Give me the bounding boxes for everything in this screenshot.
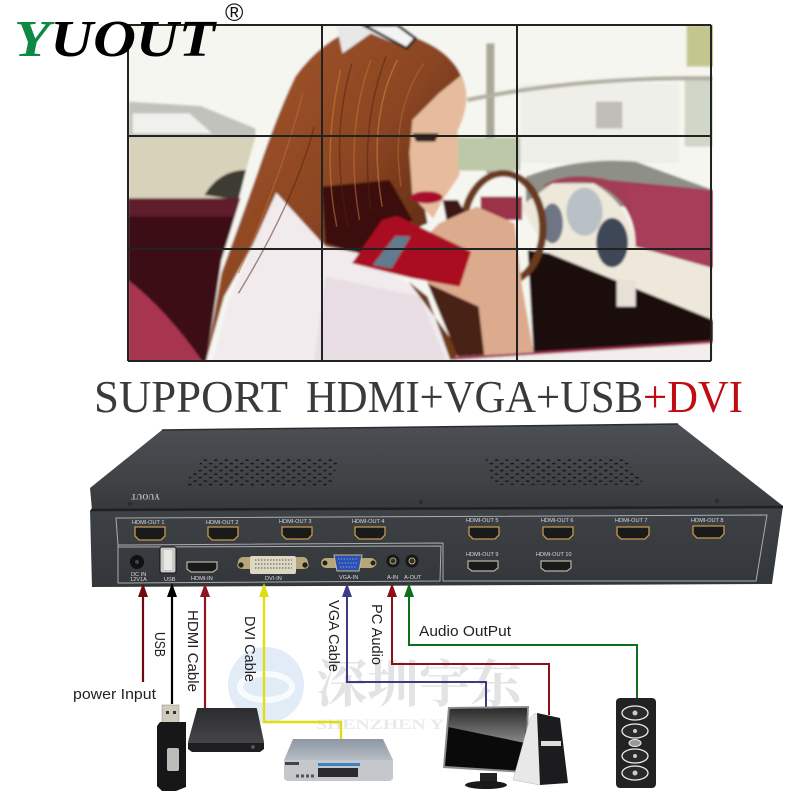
port labels: HDMI-OUT 5 (466, 518, 499, 524)
watermark: SHENZHEN Y (316, 717, 444, 733)
port labels: HDMI-OUT 2 (206, 520, 239, 526)
small HDMI ports (187, 561, 571, 572)
icon: HDMI set-top box (188, 709, 264, 752)
brand logo (14, 0, 244, 68)
device top with vents (90, 424, 783, 510)
photo: woman in red classic car on a 3x3 video wall (128, 24, 715, 362)
heading: SUPPORT (94, 371, 288, 422)
label: PC audio: PC Audio (368, 604, 385, 665)
icon: speaker (616, 698, 656, 788)
port labels: HDMI-OUT 10 (536, 552, 572, 558)
port labels: VGA-IN (339, 575, 358, 581)
port labels: HDMI-OUT 4 (352, 519, 385, 525)
arrow: power input (138, 583, 148, 682)
port labels: DC IN (131, 572, 146, 578)
device: video wall controller (90, 424, 783, 587)
icon: DVD player (284, 739, 393, 781)
port labels: DVI-IN (265, 576, 282, 582)
port labels: 12V1A (130, 577, 147, 583)
heading: HDMI+VGA+USB (306, 371, 643, 422)
port labels: USB (164, 577, 176, 583)
icon: USB flash drive (157, 705, 186, 791)
arrow: audio output (404, 583, 637, 698)
arrow: DVI cable (259, 583, 341, 740)
arrow: HDMI cable (200, 583, 210, 708)
port labels: HDMI-IN (191, 576, 213, 582)
device front panel (90, 506, 783, 587)
port labels: HDMI-OUT 7 (615, 518, 648, 524)
label: USB: USB (151, 632, 168, 657)
label: power input: power Input (73, 686, 157, 703)
label: VGA cable: VGA Cable (325, 600, 342, 672)
label: DVI cable: DVI Cable (241, 616, 258, 682)
device top with vents: YUOUT (130, 492, 160, 501)
port labels: HDMI-OUT 6 (541, 518, 574, 524)
HDMI output ports (135, 526, 724, 540)
icon: PC tower (513, 713, 568, 785)
watermark (228, 643, 525, 733)
port labels (130, 518, 724, 583)
label: HDMI cable: HDMI Cable (184, 610, 201, 692)
heading (94, 371, 743, 422)
arrow: PC audio (387, 583, 549, 715)
watermark: 深圳宇东 (316, 643, 525, 717)
label: audio output: Audio OutPut (419, 623, 512, 640)
port labels: HDMI-OUT 3 (279, 519, 312, 525)
port labels: HDMI-OUT 1 (132, 520, 165, 526)
icon: monitor (443, 706, 529, 789)
heading: +DVI (643, 371, 743, 422)
port labels: A-OUT (404, 575, 422, 581)
input connectors (130, 547, 418, 574)
video wall grid lines (128, 25, 711, 361)
arrow: VGA cable (342, 583, 486, 707)
port labels: HDMI-OUT 8 (691, 518, 724, 524)
arrow: USB (167, 583, 177, 704)
brand logo: YUOUT (14, 11, 218, 68)
port labels: HDMI-OUT 9 (466, 552, 499, 558)
port labels: A-IN (387, 575, 398, 581)
